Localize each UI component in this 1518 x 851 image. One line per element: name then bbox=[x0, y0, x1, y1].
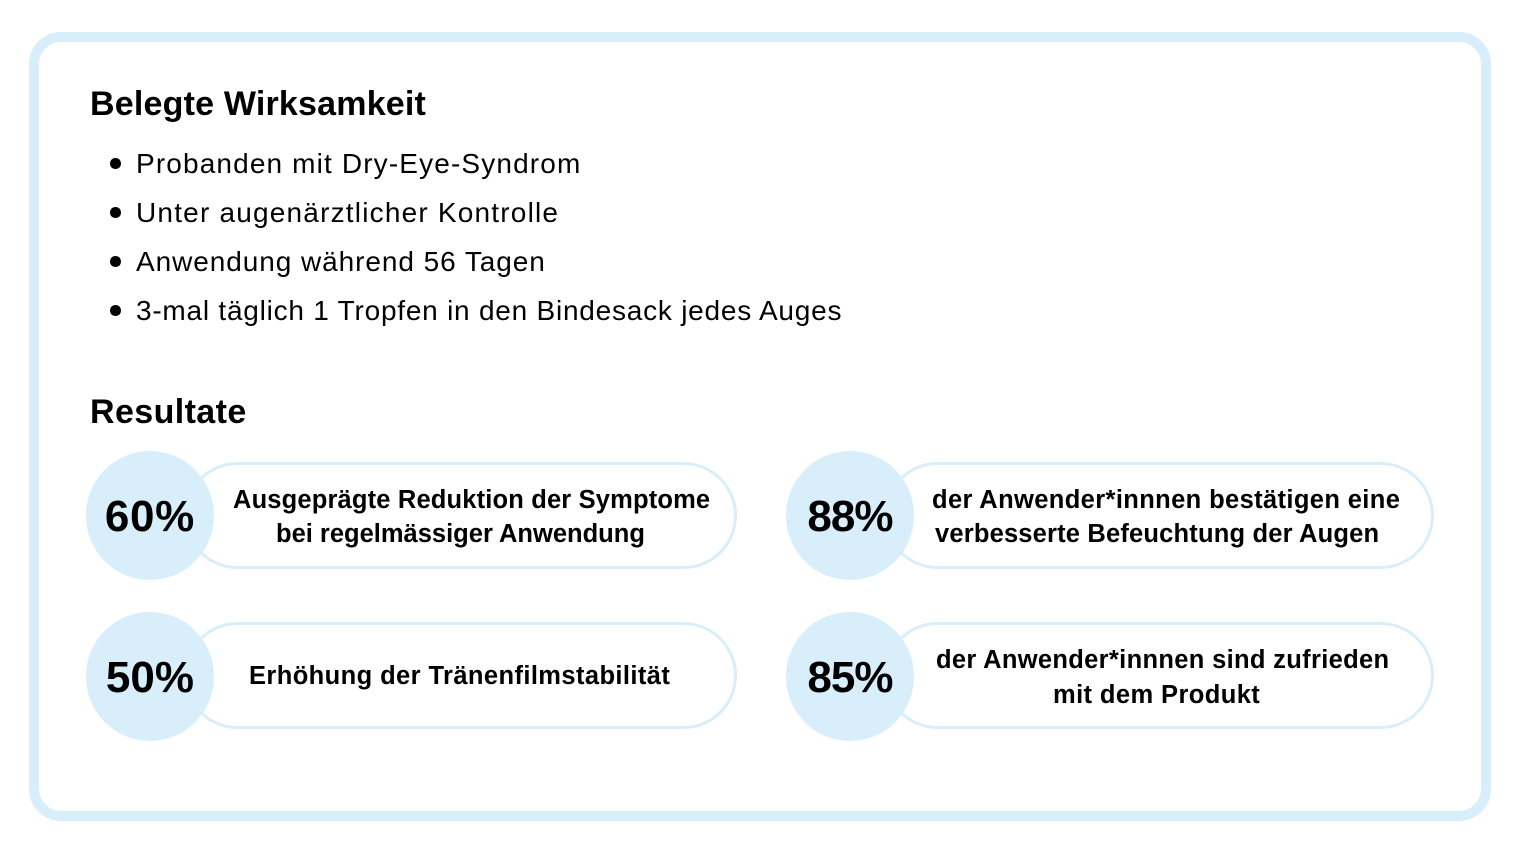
result: 85% bbox=[786, 612, 1434, 741]
text 85%: der Anwender*innnen sind zufrieden bbox=[936, 646, 1389, 674]
bullet 2: Unter augenärztlicher Kontrolle bbox=[136, 197, 559, 228]
heading: Belegte Wirksamkeit: Belegte Wirksamkeit bbox=[90, 85, 426, 123]
circle 50%: 50% bbox=[106, 653, 194, 702]
circle 88% bbox=[786, 451, 914, 580]
result: 60% bbox=[86, 451, 737, 580]
circle 88%: 88% bbox=[807, 492, 892, 541]
heading: Resultate: Resultate bbox=[90, 393, 247, 431]
text 88%: verbesserte Befeuchtung der Augen bbox=[935, 520, 1379, 548]
result: 88% bbox=[786, 451, 1434, 580]
text 85%: mit dem Produkt bbox=[1053, 681, 1260, 709]
text 88%: der Anwender*innnen bestätigen eine bbox=[932, 486, 1400, 514]
bullet list bbox=[110, 148, 842, 326]
text 88% bbox=[932, 486, 1400, 548]
bullet 4: 3-mal täglich 1 Tropfen in den Bindesack jedes Auges bbox=[136, 295, 842, 326]
circle 85% bbox=[786, 612, 914, 740]
result: 50% bbox=[86, 612, 737, 741]
text 85% bbox=[936, 646, 1389, 709]
circle 60% bbox=[86, 451, 214, 580]
bullet 1: Probanden mit Dry-Eye-Syndrom bbox=[136, 148, 581, 179]
circle 50% bbox=[86, 612, 214, 740]
circle 85%: 85% bbox=[807, 653, 892, 702]
text 60%: bei regelmässiger Anwendung bbox=[276, 520, 645, 548]
circle 60%: 60% bbox=[105, 492, 195, 541]
text 50%: Erhöhung der Tränenfilmstabilität bbox=[249, 662, 670, 690]
text 60%: Ausgeprägte Reduktion der Symptome bbox=[233, 486, 710, 514]
bullet 3: Anwendung während 56 Tagen bbox=[136, 246, 546, 277]
text 60% bbox=[233, 486, 710, 548]
